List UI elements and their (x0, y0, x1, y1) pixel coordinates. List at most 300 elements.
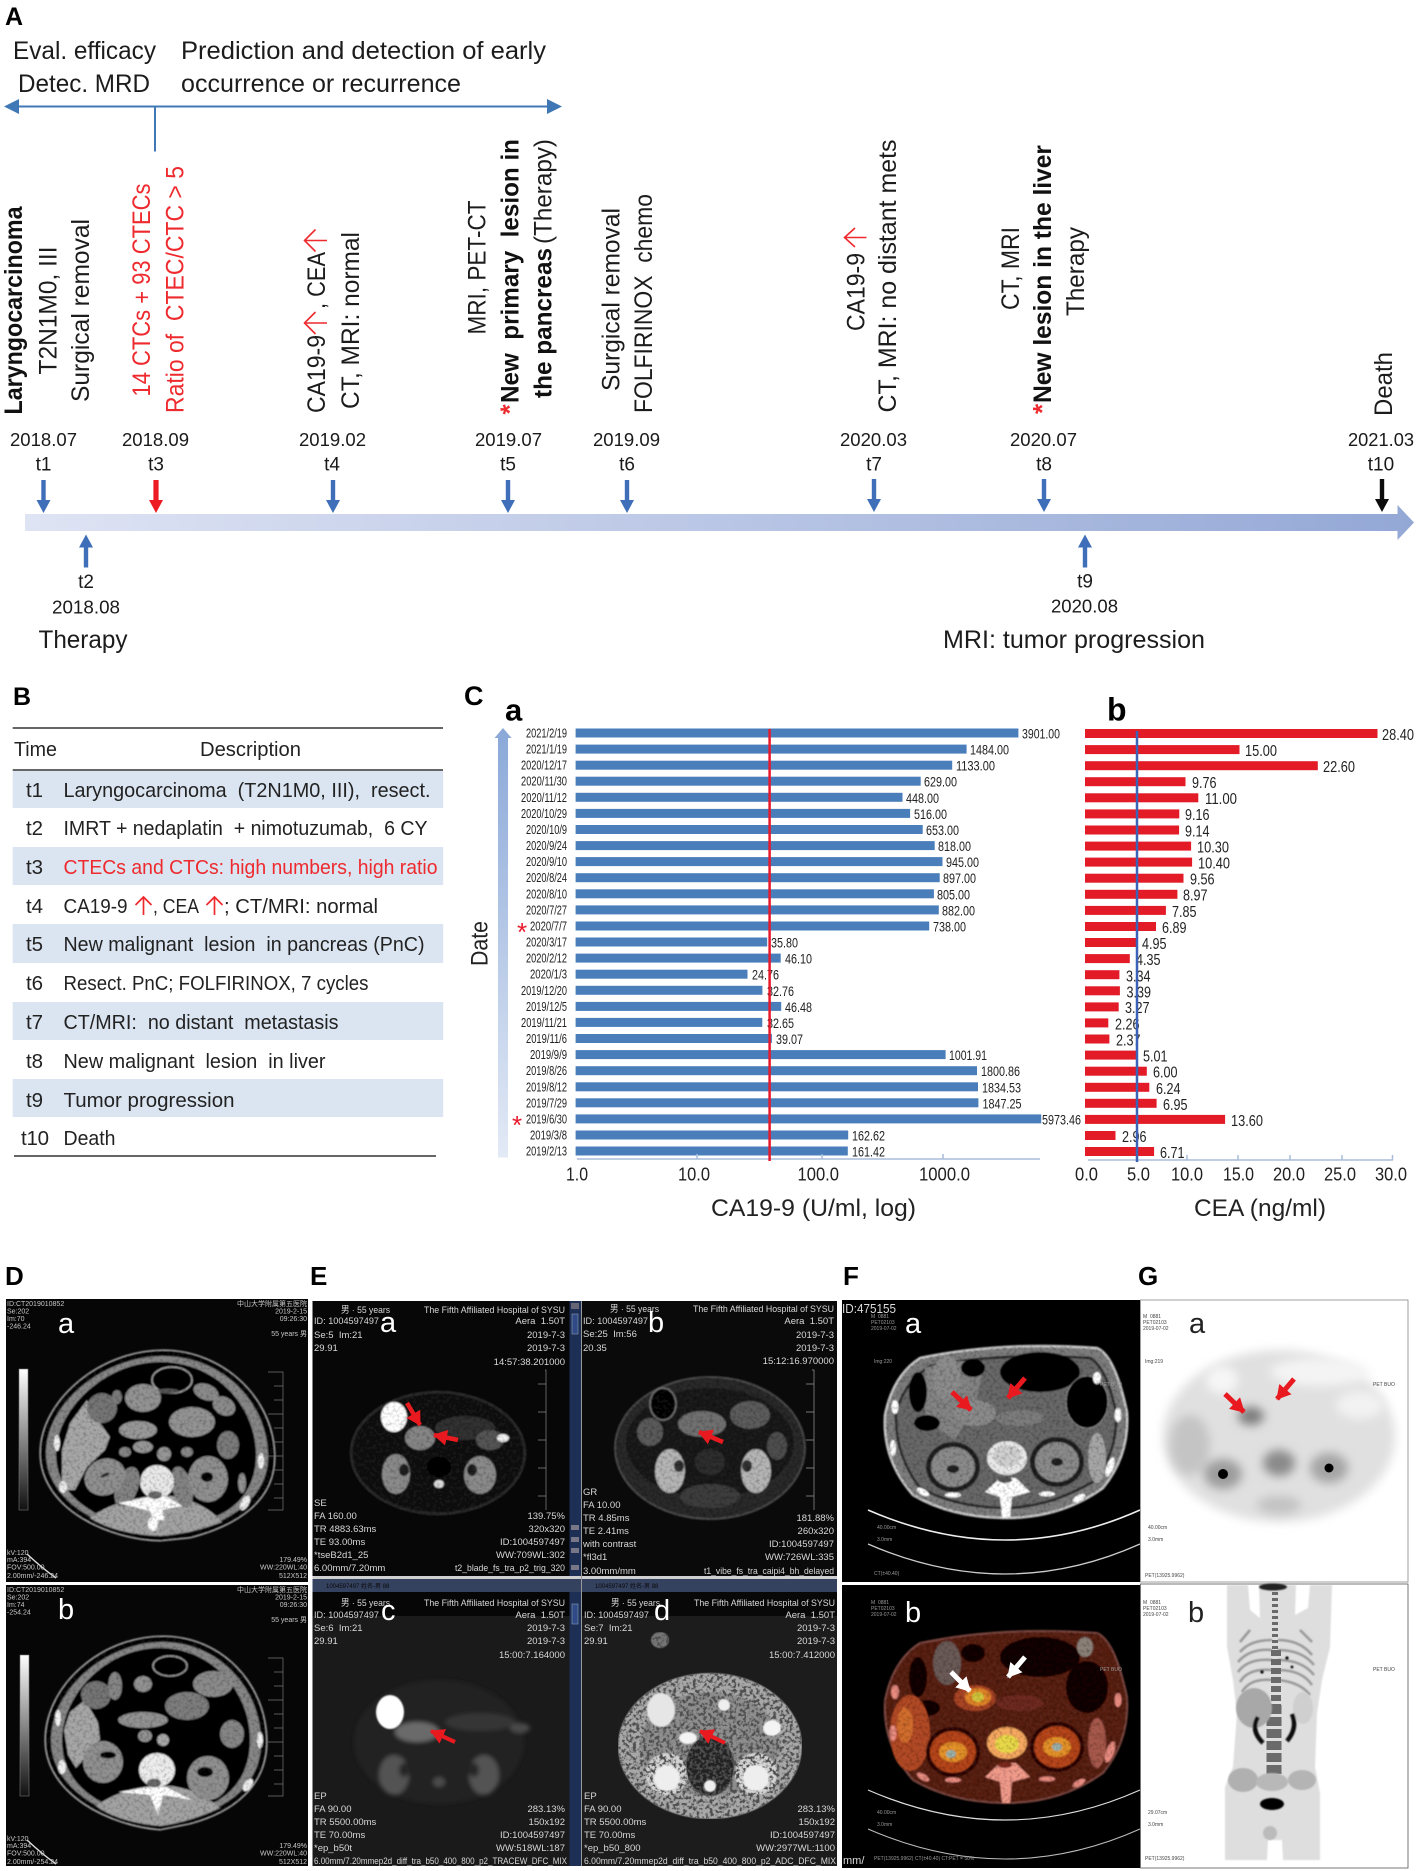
overlay text: kV:120 (7, 1836, 29, 1843)
value labels: 805.00 (937, 887, 970, 902)
PET whole-body MIP image b (1140, 1584, 1408, 1868)
overlay top band (582, 1592, 837, 1616)
red arrow (431, 1731, 455, 1742)
overlay text: 2019-07-02 (1143, 1326, 1169, 1332)
overlay text: 40.00cm (877, 1525, 896, 1531)
value labels: 161.42 (852, 1144, 885, 1160)
rotated text: t8 event: CT, MRI (997, 227, 1025, 310)
overlay text: ID:1004597497 (500, 1830, 565, 1841)
table row bands (13, 771, 443, 1117)
overlay text (1143, 1314, 1395, 1579)
CT image a (842, 1300, 1140, 1582)
date labels: 2019/3/8 (530, 1128, 567, 1142)
x axis tick labels: 0.0 (1075, 1164, 1098, 1184)
red arrows (407, 1403, 458, 1440)
row t2: IMRT + nedaplatin + nimotuzumab, 6 CY (64, 817, 428, 840)
overlay text: 179.49% (279, 1557, 307, 1564)
text: prediction purpose: occurrence or recurrence (181, 70, 461, 98)
overlay top band (312, 1592, 570, 1616)
image letter c: c (381, 1595, 396, 1627)
date labels: 2020/3/17 (526, 936, 567, 950)
uptake patterns (1170, 1358, 1384, 1514)
overlay text: 男 · 55 years (611, 1598, 660, 1609)
table header: Description (200, 738, 301, 761)
overlay text (584, 1598, 837, 1867)
overlay text (314, 1305, 566, 1574)
value labels: 1133.00 (956, 759, 995, 774)
overlay text: 6.00mm/7.20mmep2d_diff_tra_b50_400_800_p2_ADC_DFC_MIX (584, 1856, 837, 1867)
value labels: 9.56 (1190, 872, 1214, 888)
date labels: 2019/9/9 (530, 1048, 567, 1062)
red arrows (1225, 1379, 1294, 1412)
timeline bar arrow (25, 505, 1414, 540)
row t9: Tumor progression (64, 1089, 234, 1112)
rotated text: t10 death: Death (1370, 352, 1398, 416)
overlay text: 2.00mm/-254.24 (7, 1859, 58, 1866)
row t10 (21, 1127, 116, 1150)
rotated text: t4 markers: , CEA (303, 252, 331, 309)
row t3: CTECs and CTCs: high numbers, high ratio (64, 856, 438, 879)
x axis tick labels: 10.0 (678, 1164, 710, 1184)
overlay text: ID:1004597497 (500, 1537, 565, 1548)
row t9: t9 (26, 1089, 43, 1112)
row t4 (26, 895, 378, 918)
value labels: 9.76 (1192, 775, 1216, 792)
value labels: 15.00 (1245, 743, 1277, 760)
overlay text: mA:394 (7, 1557, 31, 1564)
rotated text: t5 event: New primary lesion in (496, 139, 524, 403)
value labels: 2.96 (1122, 1129, 1146, 1146)
date labels: 2021/2/19 (526, 726, 567, 740)
overlay text: 3.0mm (877, 1537, 892, 1543)
overlay text: PET02103 (871, 1606, 895, 1612)
overlay text: kV:120 (7, 1550, 29, 1557)
date labels: 2019/12/20 (521, 984, 567, 998)
overlay text: TR 5500.00ms (314, 1817, 377, 1828)
value labels: 6.89 (1162, 920, 1186, 937)
overlay text: 512X512 (279, 1573, 307, 1580)
bright structures (647, 1693, 781, 1792)
overlay text: FA 10.00 (583, 1500, 621, 1511)
value labels: 6.95 (1163, 1097, 1188, 1114)
overlay text: EP (314, 1791, 327, 1802)
value labels: 7.85 (1172, 904, 1196, 921)
labels below bar: t9 (943, 572, 1205, 654)
value labels: 629.00 (924, 775, 957, 790)
value labels: 897.00 (943, 871, 976, 886)
overlay text: PET BUO (1100, 1667, 1122, 1673)
anatomy (1163, 1350, 1395, 1522)
rotated text: t3 CTC findings: Ratio of CTEC/CTC > 5 (162, 166, 190, 413)
date labels: 2019/8/12 (526, 1080, 567, 1094)
date labels: 2020/8/24 (526, 871, 567, 885)
overlay text: Se:6 Im:21 (314, 1623, 363, 1634)
overlay text: 283.13% (527, 1804, 566, 1815)
overlay text: ID:1004597497 (770, 1830, 835, 1841)
overlay text: mm/ (843, 1855, 865, 1867)
overlay text: 20.35 (583, 1343, 607, 1354)
overlay text: PET(13925.9962) (1145, 1573, 1185, 1579)
rotated text: t4 markers: CT, MRI: normal (337, 232, 365, 409)
scanner table curves (868, 1510, 1140, 1574)
overlay text: 260x320 (798, 1526, 834, 1537)
row t5: New malignant lesion in pancreas (PnC) (64, 933, 424, 956)
overlay text: WW:726WL:335 (765, 1552, 834, 1563)
overlay text: 283.13% (797, 1804, 836, 1815)
date labels: 2020/11/12 (521, 791, 567, 805)
kidney hot spots (1218, 1464, 1334, 1479)
value labels (752, 726, 1081, 1160)
date labels: 2020/8/10 (526, 887, 567, 901)
overlay text: 2.00mm/-246.24 (7, 1573, 58, 1580)
overlay text: 14:57:38.201000 (494, 1357, 565, 1368)
MRI c: diffusion (312, 1592, 570, 1867)
rotated text: t3 CTC findings: 14 CTCs + 93 CTECs (128, 184, 156, 396)
x axis tick labels: 100.0 (798, 1164, 839, 1184)
overlay text: mA:394 (7, 1843, 31, 1850)
overlay text: WW:220WL:40 (260, 1564, 307, 1572)
panel C: tumor marker charts (464, 681, 1414, 1222)
text: evaluation purpose (13, 37, 156, 98)
overlay text: 中山大学附属第五医院 (237, 1299, 307, 1308)
spine (1274, 1592, 1276, 1775)
overlay text: 09:26:30 (280, 1316, 307, 1323)
overlay text: with contrast (582, 1539, 637, 1550)
anatomy with PET overlay (885, 1631, 1127, 1803)
overlay text: 40.00cm (1148, 1525, 1167, 1531)
overlay text: EP (584, 1791, 597, 1802)
value labels: 6.24 (1156, 1081, 1181, 1098)
value labels: 10.30 (1197, 840, 1229, 856)
overlay text: TE 93.00ms (314, 1537, 365, 1548)
value labels: 1484.00 (970, 743, 1009, 758)
overlay text: FOV:500.00 (7, 1564, 45, 1572)
timeline dates and labels above the bar: t6 (619, 454, 635, 476)
overlay text: Aera 1.50T (515, 1316, 565, 1327)
rotated text: t6 event (598, 194, 658, 413)
anatomy: abdominal cross-section (40, 1350, 275, 1541)
CT scan a (6, 1299, 308, 1582)
date labels: 2021/1/19 (526, 743, 567, 757)
value labels: 4.95 (1142, 936, 1166, 953)
x axis tick labels: 15.0 (1223, 1164, 1254, 1184)
value labels: 24.76 (752, 968, 779, 983)
value labels: 46.48 (785, 1000, 812, 1015)
double-headed arrow with stem (4, 99, 562, 152)
PET axial image a (1140, 1300, 1408, 1582)
overlay text: t2_blade_fs_tra_p2_trig_320 (455, 1563, 565, 1574)
overlay text: Se:202 (7, 1308, 29, 1316)
overlay text (582, 1304, 835, 1577)
overlay text: 29.07cm (1148, 1810, 1167, 1816)
date labels: 2019/12/5 (526, 1000, 567, 1014)
x axis (1088, 1155, 1393, 1160)
anatomy (354, 1680, 530, 1804)
value labels: 882.00 (942, 903, 975, 918)
rotated text: t8 event (997, 145, 1090, 414)
overlay text: 3.00mm/mm (583, 1566, 636, 1577)
overlay text: WW:709WL:302 (496, 1550, 565, 1561)
value labels: 5973.46 (1042, 1112, 1081, 1127)
overlay text: 181.88% (796, 1513, 835, 1524)
red arrow (699, 1432, 723, 1442)
ribs (1238, 1630, 1314, 1695)
labels below bar: t9: 2020.08 (1051, 596, 1118, 616)
timeline dates and labels above the bar: 2018.09 (122, 429, 189, 450)
overlay text: 男 · 55 years (610, 1304, 659, 1315)
scale (538, 1370, 546, 1510)
value labels: 5.01 (1143, 1048, 1168, 1066)
overlay text: Im:70 (7, 1316, 25, 1323)
labels below bar: t9: MRI: tumor progression (943, 626, 1205, 654)
overlay text: 2019-7-3 (796, 1343, 834, 1354)
overlay text: Se:202 (7, 1594, 29, 1602)
value labels: 945.00 (946, 855, 979, 870)
row t6: Resect. PnC; FOLFIRINOX, 7 cycles (64, 972, 368, 995)
x axis title: CEA (ng/ml) (1194, 1195, 1326, 1222)
anatomy (618, 1632, 802, 1819)
overlay text: 中山大学附属第五医院 (237, 1585, 307, 1594)
overlay text: Img:220 (874, 1359, 892, 1365)
rotated text: t1 event: Laryngocarcinoma (0, 205, 28, 414)
overlay text (314, 1598, 568, 1867)
row t2: t2 (26, 817, 43, 840)
overlay text (843, 1600, 1122, 1867)
overlay text: WW:220WL:40 (260, 1850, 307, 1858)
rotated text: t7 event: CA19-9 (842, 253, 870, 331)
panel G: PET scans (1138, 1261, 1408, 1868)
value labels: 4.35 (1136, 952, 1160, 969)
value labels: 46.10 (785, 952, 812, 967)
overlay text: PET BUO (1373, 1667, 1395, 1673)
gray scale bar (19, 1369, 28, 1510)
viewer scrollbars and title bars: 1004597497 姓名-男 88 (326, 1582, 390, 1590)
reference line (1136, 731, 1138, 1162)
value labels: 8.97 (1183, 888, 1208, 904)
timeline dates and labels above the bar: t8 (1036, 454, 1052, 476)
overlay text: ID: 1004597497 (583, 1316, 648, 1327)
value labels: 22.60 (1323, 759, 1355, 776)
overlay text: 3.0mm (1148, 1822, 1163, 1828)
overlay text: -246.24 (7, 1324, 31, 1330)
x axis title: CA19-9 (U/ml, log) (711, 1195, 916, 1222)
overlay text: Im:74 (7, 1602, 25, 1609)
image letter a: a (58, 1308, 75, 1340)
bright gallbladder (376, 1695, 404, 1729)
value labels: 39.07 (776, 1032, 803, 1047)
value labels: 3.34 (1126, 968, 1151, 986)
overlay text: FA 90.00 (584, 1804, 622, 1815)
panel letter A: A (5, 3, 23, 31)
date labels: 2020/1/3 (530, 968, 567, 982)
table rules (13, 728, 443, 1156)
overlay text: M 0881 (871, 1600, 889, 1606)
bars (1085, 729, 1378, 1156)
overlay text: 3.0mm (1148, 1537, 1163, 1543)
overlay text: Se:25 Im:56 (583, 1329, 637, 1340)
overlay text: 3.0mm (877, 1822, 892, 1828)
overlay text: Aera 1.50T (785, 1610, 835, 1621)
x axis (577, 1154, 1040, 1159)
overlay text: Aera 1.50T (515, 1610, 565, 1621)
rotated text: t5 event: MRI, PET-CT (464, 200, 492, 334)
date labels: 2020/9/10 (526, 855, 567, 869)
overlay text: FA 160.00 (314, 1511, 357, 1522)
PET-CT fusion image b (842, 1585, 1140, 1868)
overlay text: 40.00cm (877, 1810, 896, 1816)
date labels: 2019/11/21 (521, 1016, 567, 1030)
image letter b: b (648, 1307, 664, 1339)
panel letter D: D (5, 1261, 24, 1291)
overlay text: 2019-7-3 (796, 1330, 834, 1341)
labels below bar: t9: t9 (1077, 572, 1093, 592)
organs (1228, 1584, 1316, 1840)
row t4: t4 (26, 895, 43, 918)
value labels: 3901.00 (1022, 726, 1060, 742)
panel letter B: B (13, 683, 31, 711)
table header (14, 738, 301, 761)
chart letter a: a (505, 692, 523, 728)
anatomy (615, 1377, 805, 1519)
bar chart a: CA19-9 (512, 726, 1081, 1222)
labels below bar: t2 (38, 572, 128, 654)
date axis title: Date (466, 921, 494, 966)
rotated text: t1 event: T2N1M0, III (34, 246, 62, 374)
overlay text: 29.91 (314, 1636, 338, 1647)
overlay text: M 0881 (1143, 1314, 1161, 1320)
overlay text: PET BUO (1100, 1382, 1122, 1388)
viewer scrollbars and title bars: 1004597497 姓名-男 88 (595, 1582, 659, 1590)
chart letter b: b (1107, 692, 1127, 728)
overlay text (1143, 1600, 1395, 1862)
x axis tick labels (1075, 1164, 1407, 1184)
overlay text: FOV:500.00 (7, 1850, 45, 1858)
text: prediction purpose (181, 37, 547, 98)
overlay text: PET(13925.9962) CT(±40.40) CT:PET = 50% (874, 1856, 975, 1862)
row t8: t8 (26, 1050, 43, 1073)
overlay text: ID:1004597497 (769, 1539, 834, 1550)
rotated text: t8 event: Therapy (1062, 227, 1090, 316)
value labels: 1847.25 (982, 1096, 1022, 1111)
red asterisks: * (512, 1110, 522, 1140)
overlay text: 2019-7-3 (527, 1343, 565, 1354)
overlay text: PET02103 (1143, 1606, 1167, 1612)
overlay text: 15:00:7.164000 (499, 1650, 565, 1661)
timeline dates and labels above the bar: t7 (866, 454, 882, 476)
MRI b: contrast enhanced (582, 1301, 837, 1577)
overlay text: 15:12:16.970000 (763, 1356, 834, 1367)
overlay text (7, 1299, 307, 1580)
text: evaluation purpose: Detec. MRD (18, 70, 150, 98)
viewer scrollbars and title bars (312, 1301, 842, 1866)
overlay text: 2019-7-3 (527, 1330, 565, 1341)
date labels: 2019/8/26 (526, 1064, 567, 1078)
panel B: event table (13, 683, 443, 1156)
panel D: CT scans (5, 1261, 308, 1866)
timeline dates and labels above the bar: 2018.07 (10, 429, 77, 450)
value labels: 738.00 (933, 920, 966, 934)
image letter a: a (905, 1308, 922, 1340)
x axis tick labels: 25.0 (1324, 1164, 1356, 1184)
row t7: CT/MRI: no distant metastasis (64, 1011, 338, 1034)
timeline dates and labels above the bar: 2020.07 (1010, 429, 1077, 450)
x axis tick labels: 30.0 (1375, 1164, 1407, 1184)
date labels: 2020/12/17 (521, 759, 567, 773)
overlay text: 2019-7-3 (527, 1623, 565, 1634)
reference line (768, 729, 771, 1161)
value labels (1115, 727, 1414, 1162)
timeline dates and labels above the bar: t3 (148, 454, 164, 476)
rotated text: t3 CTC findings (128, 166, 190, 413)
overlay text: 150x192 (529, 1817, 565, 1828)
overlay text: M 0881 (1143, 1600, 1161, 1606)
anatomy (885, 1346, 1127, 1518)
overlay text: -254.24 (7, 1610, 31, 1616)
overlay text: The Fifth Affiliated Hospital of SYSU (424, 1305, 565, 1316)
overlay text: 09:26:30 (280, 1602, 307, 1609)
timeline dates and labels above the bar: t1 (36, 454, 51, 476)
row t4: ; CT/MRI: normal (224, 895, 378, 918)
value labels: 10.40 (1198, 856, 1230, 872)
value labels: 32.65 (767, 1016, 794, 1031)
overlay text (7, 1585, 307, 1866)
panel letter E: E (310, 1261, 327, 1291)
text: prediction purpose: Prediction and detection of early (181, 37, 547, 65)
overlay text: TR 4.85ms (583, 1513, 630, 1524)
overlay text: TR 5500.00ms (584, 1817, 647, 1828)
panel A: clinical timeline (0, 3, 1414, 654)
value labels: 9.14 (1185, 824, 1210, 840)
rotated text: t7 event (842, 140, 902, 412)
overlay text: PET02103 (1143, 1320, 1167, 1326)
overlay text: The Fifth Affiliated Hospital of SYSU (424, 1598, 565, 1609)
overlay text: 179.49% (279, 1843, 307, 1850)
timeline dates and labels above the bar: t4 (324, 454, 340, 476)
timeline dates and labels above the bar: 2019.07 (475, 429, 542, 450)
timeline dates and labels above the bar: 2020.03 (840, 429, 907, 450)
red asterisks: * (517, 917, 527, 947)
ruler (268, 1372, 283, 1510)
image letter a: a (380, 1307, 397, 1339)
overlay text: 55 years 男 (271, 1616, 307, 1624)
overlay text: TE 70.00ms (584, 1830, 635, 1841)
overlay text: 男 · 55 years (341, 1305, 390, 1316)
scan table curve (27, 1554, 56, 1578)
date labels: 2019/6/30 (526, 1112, 567, 1126)
overlay text: 55 years 男 (271, 1330, 307, 1338)
value labels: 35.80 (771, 936, 798, 950)
row t4: , CEA (153, 895, 199, 918)
date labels: 2020/11/30 (521, 775, 567, 789)
rotated text: t8 event: New lesion in the liver (1029, 145, 1057, 403)
rotated text: t4 markers: CA19-9 (303, 335, 331, 413)
rotated text: t5 event: * (494, 404, 524, 414)
value labels: 32.76 (767, 984, 794, 999)
overlay text: 2019-2-15 (275, 1594, 307, 1602)
overlay text: 139.75% (527, 1511, 566, 1522)
labels below bar: t2: Therapy (38, 626, 128, 654)
overlay text: ID: 1004597497 (314, 1610, 379, 1621)
overlay text: TE 2.41ms (583, 1526, 629, 1537)
row t8: New malignant lesion in liver (64, 1050, 326, 1073)
overlay text: CT(±40.40) (874, 1571, 900, 1577)
panel letter G: G (1138, 1261, 1158, 1291)
overlay text: ID:CT2019010852 (7, 1301, 64, 1308)
white arrows (951, 1657, 1025, 1691)
date labels: 2020/10/9 (526, 823, 567, 837)
overlay text: WW:2977WL:1100 (756, 1843, 835, 1854)
row t1: t1 (26, 779, 43, 802)
